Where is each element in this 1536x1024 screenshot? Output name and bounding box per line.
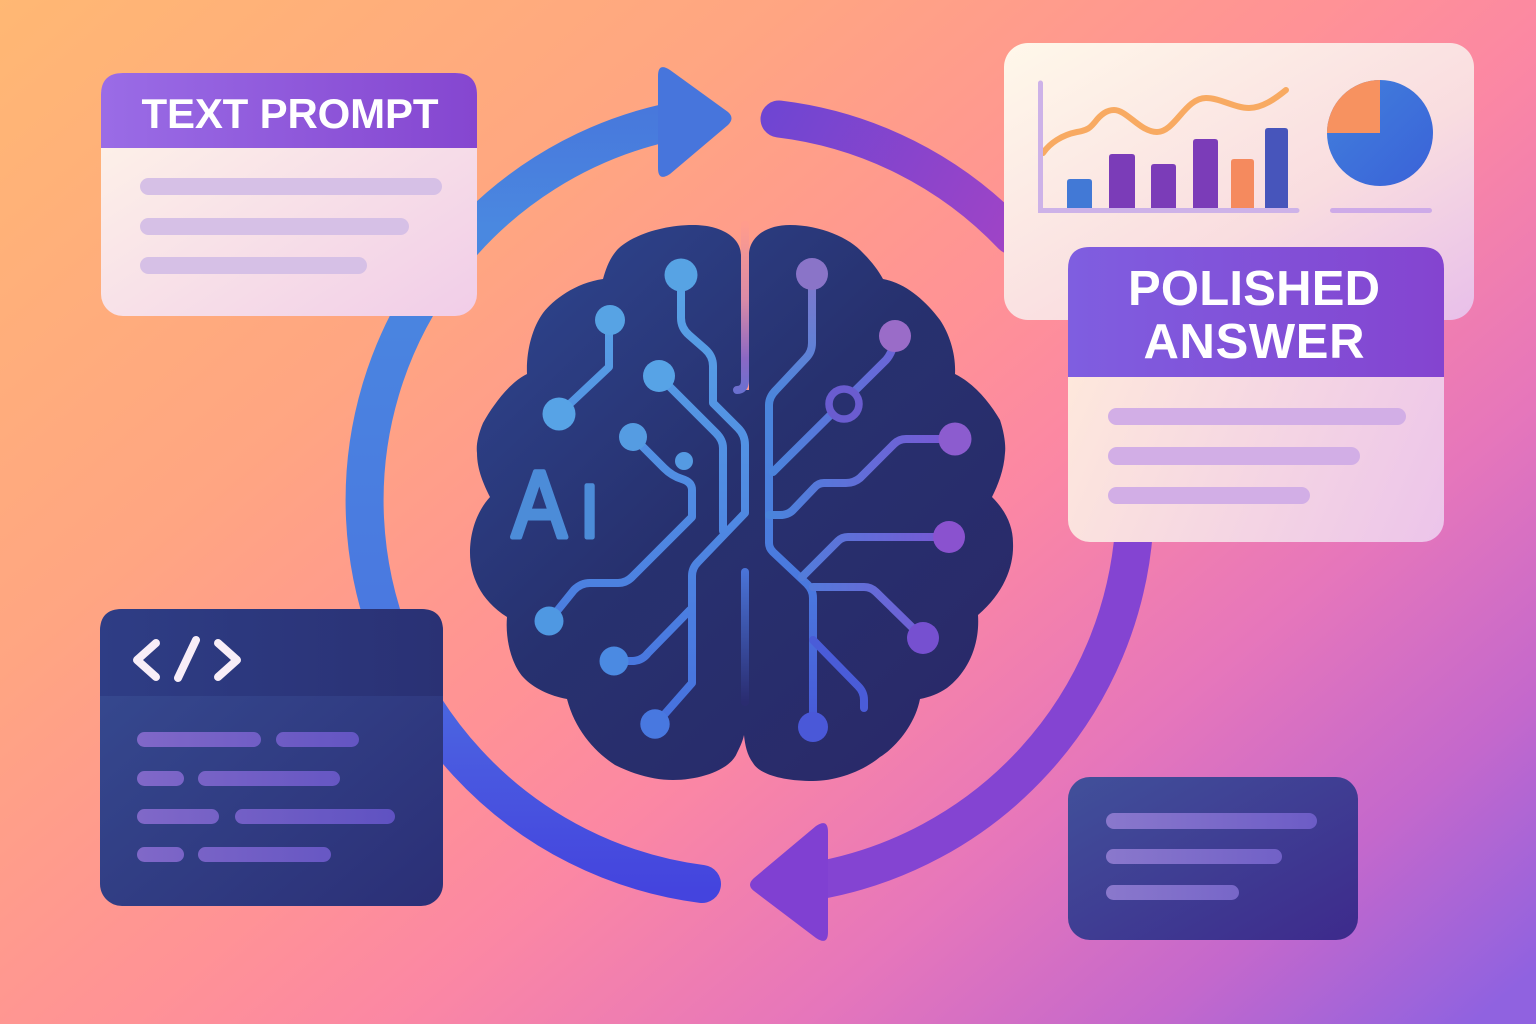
- arrow: bottom-right purple arc with arrowhead: [750, 530, 1134, 941]
- label: AI: A: [512, 451, 566, 557]
- lower right branch trace: [813, 640, 864, 708]
- lower midline trace: [741, 572, 749, 702]
- left circuit traces: [549, 276, 745, 724]
- small card lines: [1106, 813, 1317, 900]
- code window header: [100, 609, 443, 696]
- brain illustration: [470, 225, 1013, 781]
- panel: polished answer card: [1068, 247, 1444, 542]
- heading: polished answer: POLISHED: [1128, 262, 1380, 316]
- heading: polished answer: ANSWER: [1144, 315, 1364, 369]
- line chart: [1043, 90, 1286, 153]
- arrow: top-right purple arc: [779, 119, 1012, 236]
- hollow circuit node: [829, 389, 859, 419]
- right branch traces: [769, 338, 955, 638]
- panel: text prompt card: [101, 73, 477, 316]
- icon: code brackets: [137, 640, 237, 678]
- left circuit nodes: [534, 258, 698, 739]
- heading: polished answer: [1128, 262, 1380, 369]
- heading: text prompt: TEXT PROMPT: [142, 90, 439, 137]
- pie caption line: [1330, 208, 1432, 213]
- label: AI: I: [581, 471, 598, 553]
- polished answer header: [1068, 247, 1444, 377]
- code lines: [137, 732, 395, 862]
- brain left hemisphere: [470, 225, 745, 780]
- panel: chart dashboard card: [1004, 43, 1474, 320]
- text prompt header: [101, 73, 477, 148]
- chart axes: [1040, 83, 1297, 210]
- bar chart: [1067, 128, 1288, 208]
- pie chart: [1327, 80, 1433, 186]
- hemisphere gap trace: [737, 225, 745, 390]
- right trunk trace: [769, 274, 813, 727]
- answer placeholder lines: [1108, 408, 1406, 504]
- right circuit nodes: [796, 258, 972, 742]
- text placeholder lines: [140, 178, 442, 274]
- panel: code window: [100, 609, 443, 906]
- arrow: left blue arc with arrowhead: [365, 67, 732, 884]
- panel: small dark card: [1068, 777, 1358, 940]
- brain right hemisphere: [744, 225, 1013, 781]
